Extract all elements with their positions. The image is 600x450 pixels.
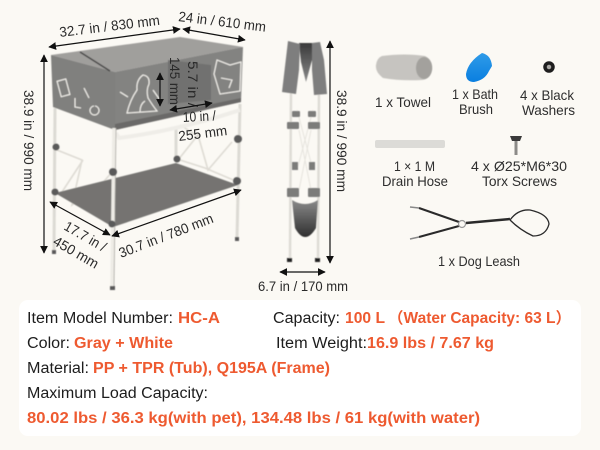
spec: material: Material:	[27, 360, 89, 377]
item: torx screws	[471, 136, 567, 189]
spec: maximum load label: Maximum Load Capacity:	[27, 385, 208, 402]
panel background	[19, 300, 581, 436]
spec: color	[27, 335, 173, 352]
label: bath brush: 1 x Bath	[452, 86, 498, 102]
spec: color: Gray + White	[74, 335, 173, 352]
item: dog leash	[410, 207, 549, 269]
spec: color: Color:	[27, 335, 70, 352]
label: shelf depth: 450 mm	[50, 233, 102, 272]
panel: specifications	[19, 300, 581, 436]
drain flap	[168, 60, 211, 104]
folded shelf	[292, 200, 318, 237]
label: tub length: 32.7 in / 830 mm	[58, 12, 161, 40]
scissor braces	[57, 125, 238, 220]
tub left side	[51, 55, 115, 130]
label: shelf depth	[50, 218, 109, 272]
arrow: total height	[43, 55, 45, 253]
label: folded width: 6.7 in / 170 mm	[258, 278, 348, 294]
icon: washer	[545, 63, 553, 71]
label: tub depth: 145 mm	[167, 57, 183, 105]
spec: item model number: HC-A	[178, 310, 220, 327]
tub back interior	[51, 37, 243, 72]
item: black washers: Washers	[522, 102, 575, 118]
hose strap	[80, 52, 110, 71]
label: dog leash: 1 x Dog Leash	[438, 253, 520, 269]
folded left flap	[282, 41, 300, 94]
joints and feet	[52, 135, 242, 290]
label: shelf length: 30.7 in / 780 mm	[116, 210, 215, 261]
icon: screw	[510, 136, 522, 155]
item: towel	[375, 54, 432, 110]
folded right flap	[312, 42, 327, 95]
lower shelf	[55, 163, 238, 227]
arrow: tub width	[183, 29, 245, 40]
front leg	[112, 128, 114, 287]
label: total height: 38.9 in / 990 mm	[21, 90, 37, 191]
label: folded height: 38.9 in / 990 mm	[334, 90, 350, 192]
icon: hose	[375, 140, 445, 148]
arrow: shelf length	[112, 190, 241, 236]
folded scissor braces	[297, 110, 313, 190]
arrow: tub length	[49, 29, 180, 47]
label: inner width: 10 in /	[182, 107, 216, 125]
item: black washers	[520, 63, 575, 118]
item: bath brush: Brush	[459, 101, 493, 117]
spec: capacity	[273, 310, 571, 327]
spec: material: PP + TPR (Tub), Q195A (Frame)	[93, 360, 330, 377]
spec: item weight: Item Weight:	[276, 335, 367, 352]
dog outline artwork	[57, 60, 241, 115]
folded feet	[287, 258, 320, 262]
folded bracket pairs	[287, 111, 320, 197]
arrow: shelf depth	[50, 202, 110, 235]
arrow: folded width	[280, 271, 325, 273]
label: inner width: 255 mm	[177, 122, 228, 144]
spec: item weight	[276, 335, 494, 352]
label: washers: 4 x Black	[520, 87, 575, 103]
upper white rail	[116, 110, 240, 138]
arrow: folded height	[329, 41, 331, 263]
illustration: folded tub	[282, 41, 327, 262]
spec: item weight: 16.9 lbs / 7.67 kg	[367, 335, 494, 352]
folded centre shadow	[299, 43, 313, 82]
spec: capacity: Capacity:	[273, 310, 340, 327]
label: tub depth: 5.7 in /	[185, 61, 201, 107]
item: drain hose: Drain Hose	[382, 173, 448, 189]
label: tub depth	[167, 57, 201, 107]
folded legs	[290, 90, 319, 258]
arrow: inner width	[170, 103, 212, 110]
towel shading	[416, 57, 432, 79]
front leg outline	[114, 128, 116, 287]
label: towel: 1 x Towel	[375, 94, 431, 110]
arrow: tub depth	[159, 73, 161, 106]
spec: item model number: Item Model Number:	[27, 310, 173, 327]
item: drain hose	[375, 140, 448, 189]
label: shelf depth: 17.7 in /	[62, 218, 109, 255]
label: drain hose: 1 × 1 M	[394, 158, 435, 174]
tub right side	[115, 47, 243, 130]
item: bath brush	[452, 53, 498, 117]
spec: capacity: （Water Capacity: 63 L）	[388, 310, 571, 327]
rear and side legs	[54, 104, 240, 251]
label: torx screws: 4 x Ø25*M6*30	[471, 158, 567, 174]
label: tub width: 24 in / 610 mm	[178, 8, 267, 35]
item: torx screws: Torx Screws	[482, 173, 557, 189]
tub dark bottom edge	[115, 98, 241, 130]
spec: maximum load values: 80.02 lbs / 36.3 kg(with pet), 134.48 lbs / 61 kg(with water)	[27, 410, 480, 427]
icon: leash	[410, 207, 549, 239]
icon: towel roll	[376, 54, 432, 80]
illustration: assembled dog bath tub	[51, 37, 243, 290]
label: inner width	[177, 107, 228, 144]
spec: capacity: 100 L	[345, 310, 385, 327]
icon: blue brush	[466, 53, 492, 82]
